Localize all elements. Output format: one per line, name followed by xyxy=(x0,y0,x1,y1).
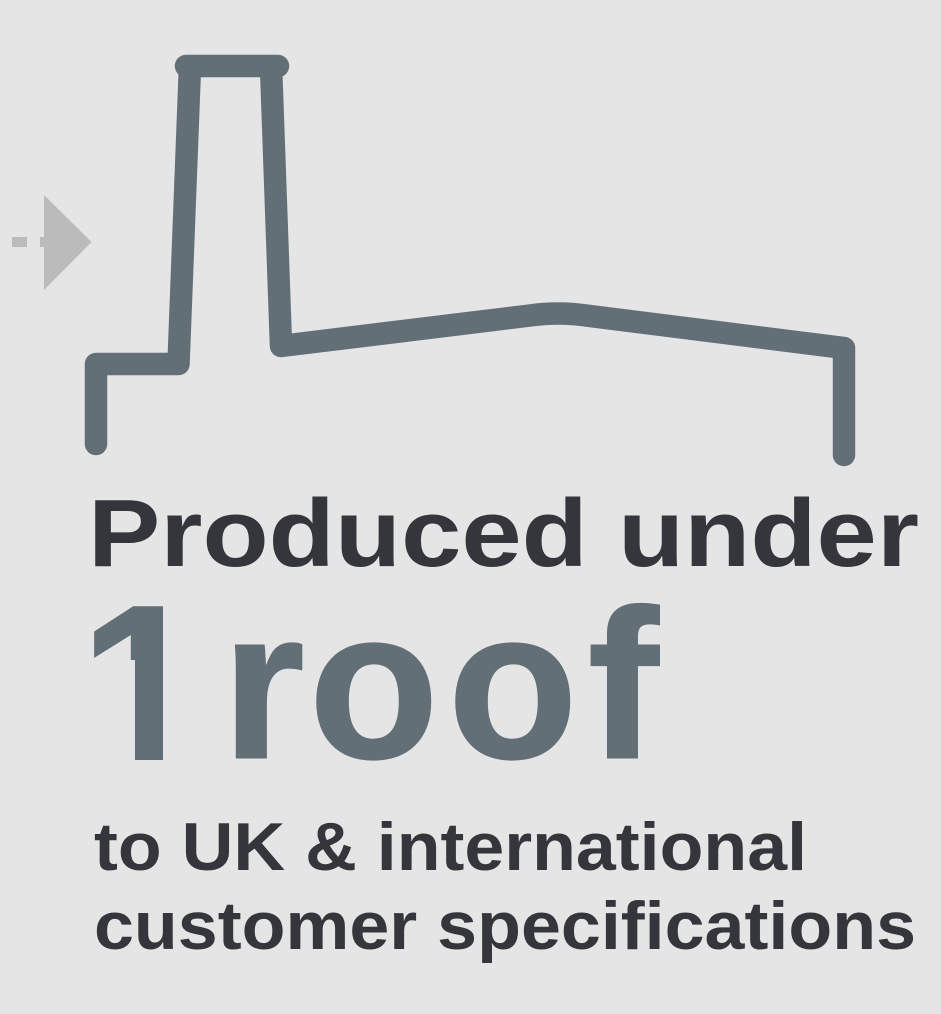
heading: 1 roof: 1 xyxy=(80,560,203,808)
icon: arrow xyxy=(12,195,92,290)
heading: 1 roof: roof xyxy=(222,566,660,802)
heading: 1 roof xyxy=(94,602,660,761)
text block: specifications xyxy=(94,809,916,964)
heading: produced under: Produced under xyxy=(88,480,919,587)
text block: specifications: to UK & international xyxy=(94,809,807,885)
text block: specifications: customer specifications xyxy=(94,888,916,964)
icon: factory outline xyxy=(96,66,844,455)
